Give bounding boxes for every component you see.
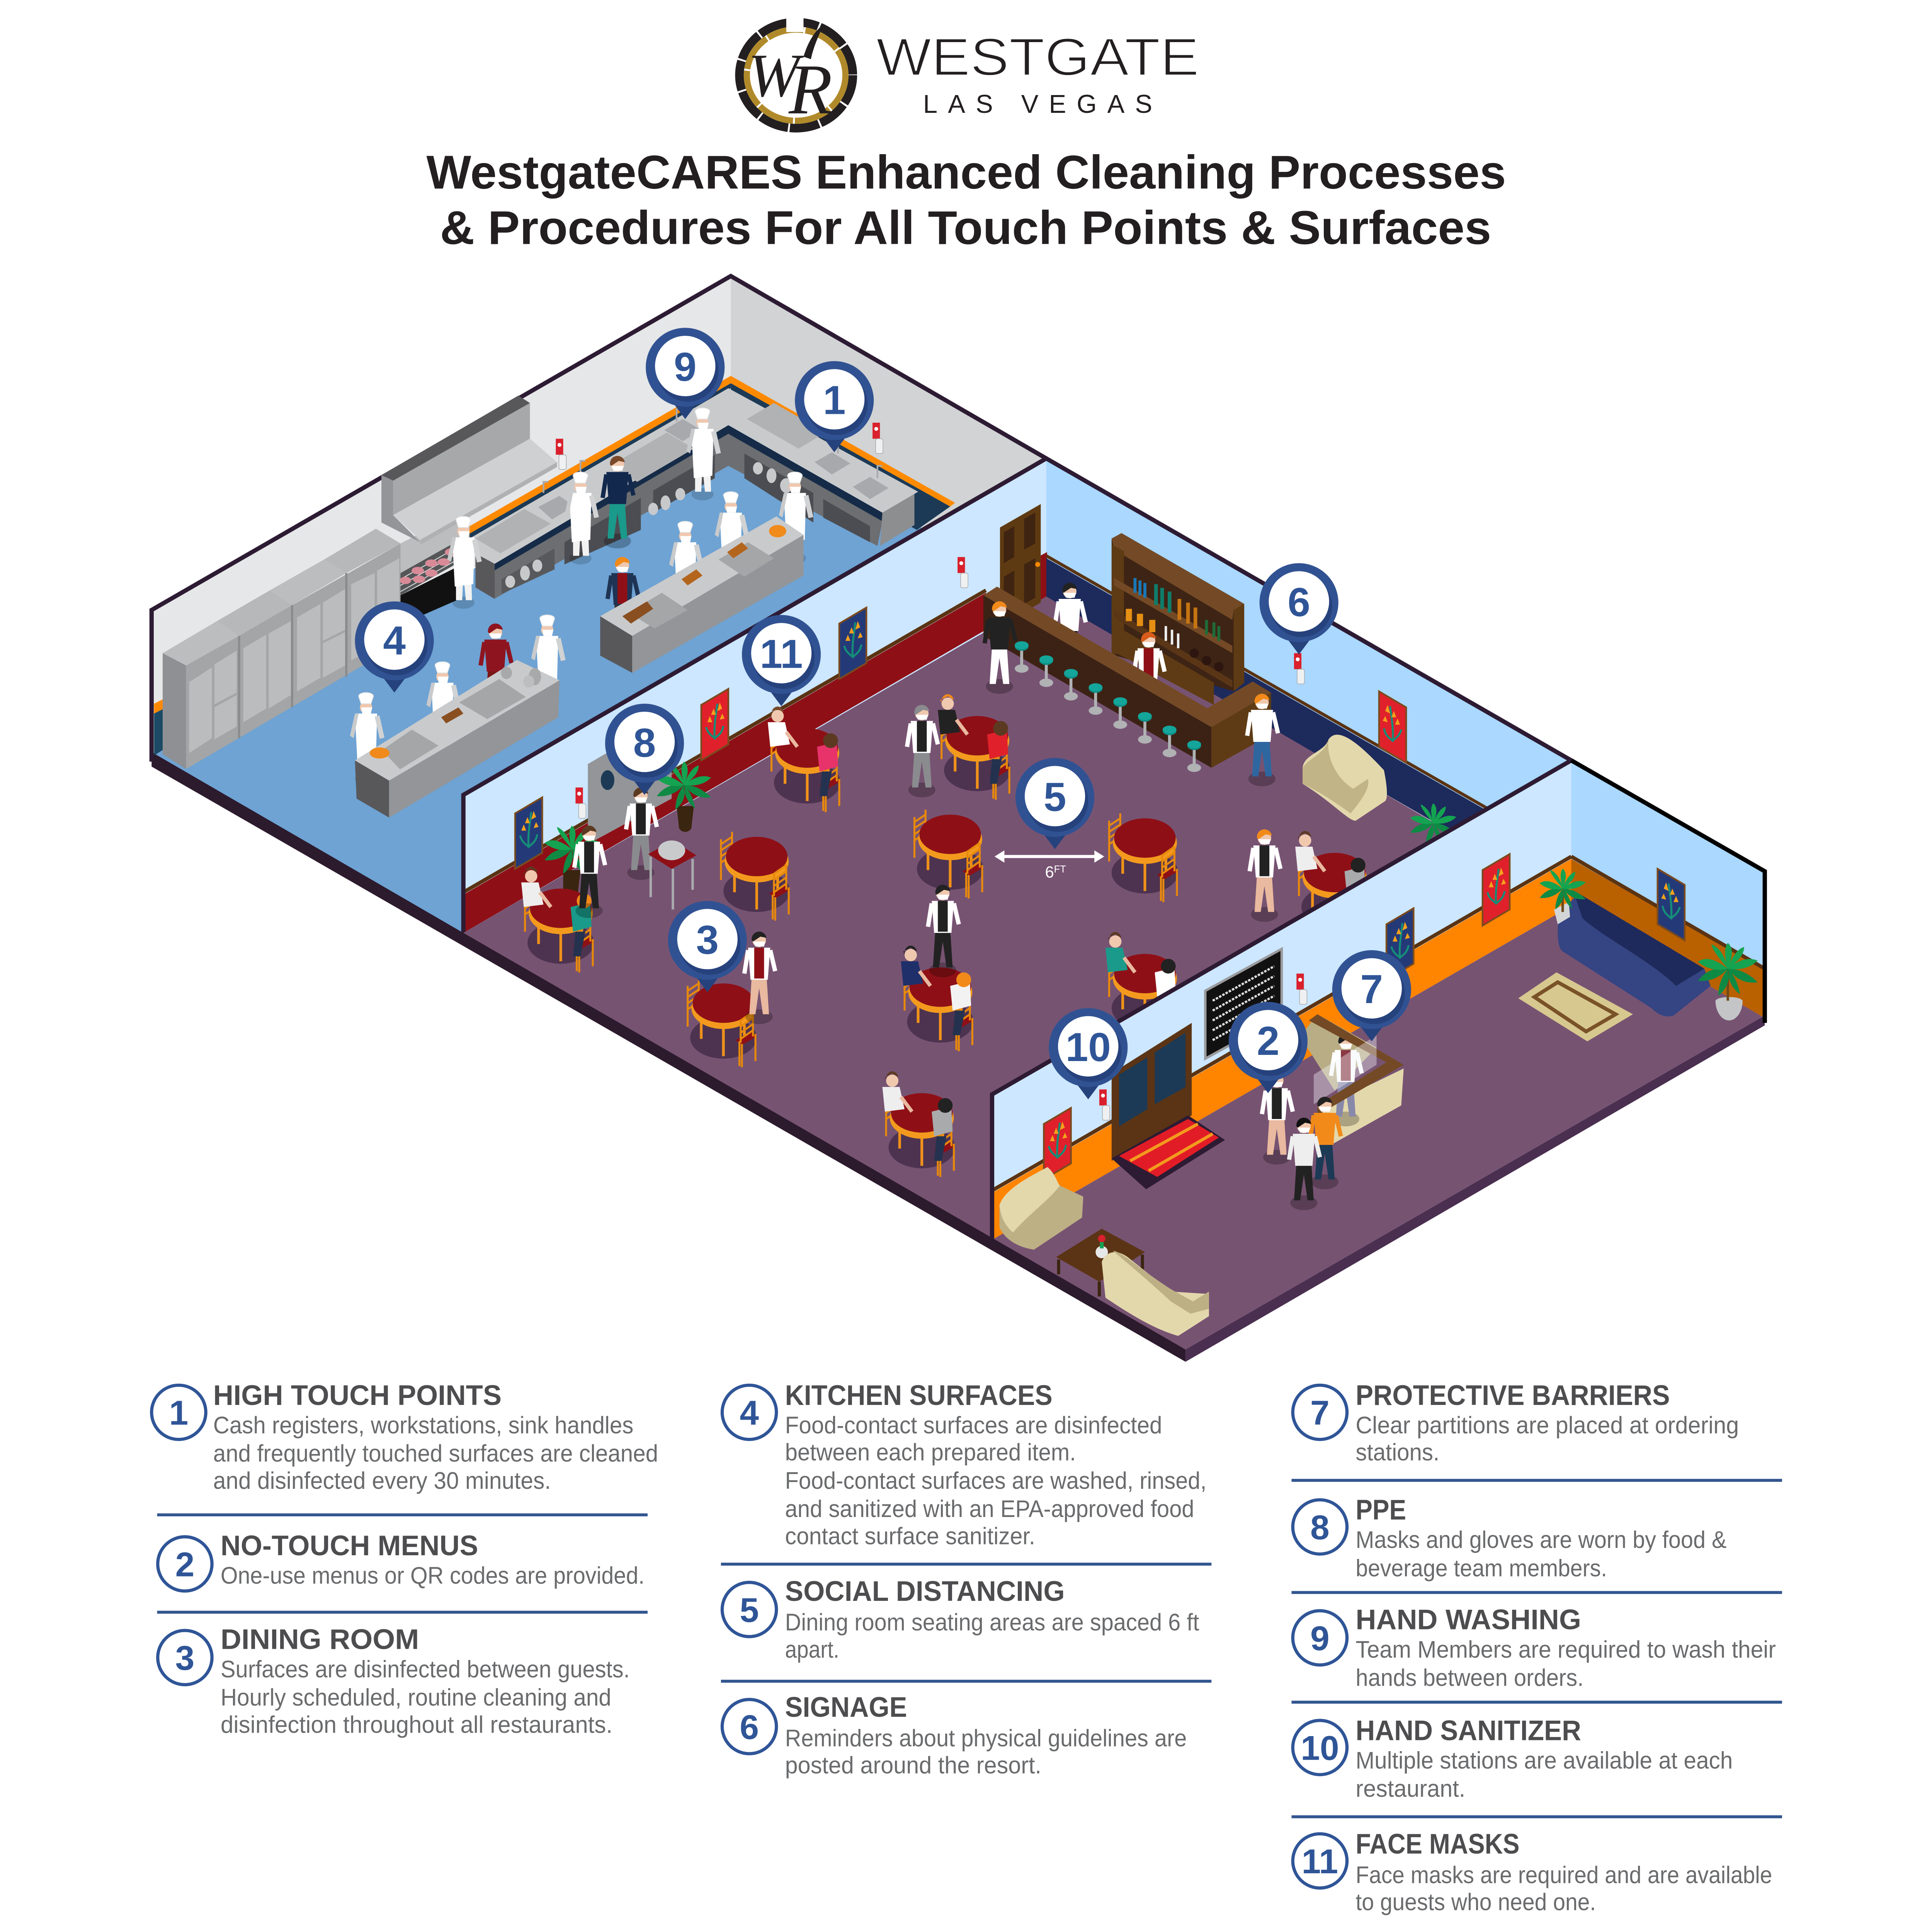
bar counter: [983, 587, 1271, 768]
hood: [381, 396, 557, 545]
entrance door: [1112, 1023, 1192, 1161]
kitchen staff behind island B: [350, 615, 563, 785]
lobby back wall: [1571, 760, 1765, 1023]
pin 2: 2: [1257, 1019, 1279, 1064]
grill: [400, 508, 469, 622]
table with guests 2: [938, 694, 1010, 800]
item 8: PPE: 8: [1310, 1508, 1330, 1547]
item 4: kitchen surfaces: between each prepared item.: [785, 1439, 1076, 1466]
bar shelving: [1112, 533, 1244, 705]
item 6: signage: 6: [740, 1708, 759, 1746]
item 3: dining room: Surfaces are disinfected between guests.: [221, 1656, 630, 1683]
item 5: social distancing: Dining room seating areas are spaced 6 ft: [785, 1609, 1199, 1636]
island A: [600, 516, 803, 673]
lobby armchair near wall: [1000, 1167, 1083, 1250]
pin 6: 6: [1287, 580, 1310, 625]
pin 6: [1260, 563, 1338, 655]
item 1: high touch points: 1: [169, 1393, 188, 1432]
panel: lobby: [992, 760, 1765, 1336]
dining floor: [463, 597, 1765, 1349]
logo: Westgate Las Vegas: [740, 12, 1199, 129]
item 1: high touch points: Cash registers, workstations, sink handles: [213, 1412, 633, 1439]
item 6: signage: SIGNAGE: [785, 1691, 907, 1723]
item 2: no-touch menus: 2: [175, 1545, 194, 1583]
coffee table: [1056, 1229, 1145, 1296]
legend column 1: [151, 1379, 658, 1738]
pin 2: [1229, 1002, 1308, 1093]
item 7: protective barriers: Clear partitions are placed at ordering: [1355, 1412, 1739, 1439]
table with guests 11: [1295, 831, 1368, 937]
table with guests 8: [901, 946, 974, 1051]
dining staff and patrons: [574, 601, 1281, 1024]
social distancing marker: [995, 850, 1104, 881]
plant: lobby right: [1698, 943, 1758, 1020]
item 7: protective barriers: [1293, 1379, 1739, 1466]
item 11: face masks: Face masks are required and are available: [1355, 1862, 1772, 1888]
item 8: PPE: [1293, 1494, 1726, 1582]
item 7: protective barriers: stations.: [1355, 1439, 1439, 1466]
logo wordmark: WESTGATE: [876, 28, 1199, 87]
pin 7: 7: [1361, 967, 1383, 1012]
pin 8: [605, 704, 684, 795]
item 9: hand washing: HAND WASHING: [1355, 1604, 1581, 1635]
pin 4: [355, 601, 434, 692]
item 1: high touch points: and disinfected every 30 minutes.: [213, 1468, 551, 1494]
panel: kitchen: [151, 276, 1046, 933]
pin 10: [1049, 1008, 1128, 1099]
item 10: hand sanitizer: HAND SANITIZER: [1355, 1714, 1581, 1746]
isometric restaurant floor plan: [151, 276, 1765, 1362]
rug: [1518, 972, 1633, 1041]
item 10: hand sanitizer: Multiple stations are available at each: [1355, 1747, 1733, 1774]
item 11: face masks: FACE MASKS: [1355, 1828, 1520, 1860]
pin 5: 5: [1044, 775, 1066, 820]
empty table 3: [915, 810, 983, 898]
item 4: kitchen surfaces: and sanitized with an EPA-approved food: [785, 1496, 1194, 1522]
island B: [355, 660, 560, 818]
item 9: hand washing: 9: [1310, 1619, 1330, 1658]
item 5: social distancing: 5: [740, 1590, 759, 1629]
item 9: hand washing: Team Members are required to wash their: [1355, 1636, 1776, 1663]
serving cart: [648, 840, 696, 910]
logo emblem: R: [788, 50, 832, 129]
floor slab: [151, 752, 1765, 1362]
item 5: social distancing: apart.: [785, 1636, 839, 1663]
pin 8: 8: [633, 720, 656, 765]
bar staff: [1055, 583, 1165, 724]
item 3: dining room: [158, 1623, 630, 1738]
item 4: kitchen surfaces: Food-contact surfaces are washed, rinsed,: [785, 1468, 1206, 1494]
plant: by dining wall: [545, 826, 599, 896]
pin 11: [742, 615, 821, 706]
pin 1: [795, 361, 874, 452]
pin 3: 3: [696, 918, 719, 963]
item 8: PPE: PPE: [1355, 1494, 1406, 1526]
item 9: hand washing: hands between orders.: [1355, 1665, 1583, 1691]
title: & Procedures For All Touch Points & Surfaces: [440, 202, 1491, 255]
item 2: no-touch menus: NO-TOUCH MENUS: [221, 1530, 478, 1561]
wall art and signage: [515, 557, 1406, 869]
item 1: high touch points: and frequently touched surfaces are cleaned: [213, 1440, 658, 1467]
table with guests 10: [883, 1071, 955, 1177]
service door: [588, 715, 672, 844]
item 10: hand sanitizer: restaurant.: [1355, 1776, 1465, 1802]
item 3: dining room: disinfection throughout all restaurants.: [221, 1711, 612, 1738]
legend column 3: [1292, 1379, 1782, 1916]
item 6: signage: [722, 1691, 1187, 1779]
social distancing marker: FT: [1054, 864, 1066, 875]
armchair: [1303, 735, 1387, 821]
item 7: protective barriers: PROTECTIVE BARRIERS: [1355, 1379, 1670, 1411]
item 3: dining room: DINING ROOM: [221, 1623, 419, 1655]
item 6: signage: Reminders about physical guidelines are: [785, 1725, 1187, 1752]
item 3: dining room: 3: [175, 1639, 194, 1677]
pin 3: [668, 901, 747, 992]
empty table 5: [721, 832, 790, 920]
item 8: PPE: Masks and gloves are worn by food &: [1355, 1527, 1726, 1553]
social distancing marker: 6: [1045, 863, 1054, 881]
panel: dining room: [463, 458, 1765, 1349]
logo emblem: [740, 12, 853, 129]
item 4: kitchen surfaces: 4: [740, 1393, 759, 1432]
item 4: kitchen surfaces: [722, 1379, 1206, 1549]
item 9: hand washing: [1293, 1604, 1776, 1691]
L-shaped counter: [458, 388, 918, 599]
kitchen staff at counter: [447, 408, 718, 609]
red entrance mat: [1112, 1115, 1225, 1189]
logo subtitle: LAS VEGAS: [923, 90, 1152, 119]
logo emblem: W: [748, 42, 804, 110]
item 7: protective barriers: 7: [1310, 1393, 1330, 1432]
lockers: [163, 529, 401, 769]
item 10: hand sanitizer: [1293, 1714, 1733, 1802]
menu board: [1205, 949, 1282, 1059]
pin 10: 10: [1066, 1025, 1111, 1070]
bar stools: [1015, 641, 1201, 772]
item 11: face masks: to guests who need one.: [1355, 1889, 1596, 1916]
item 1: high touch points: [151, 1379, 658, 1494]
pin 7: [1332, 950, 1411, 1041]
item 10: hand sanitizer: 10: [1301, 1728, 1339, 1767]
item 5: social distancing: [722, 1575, 1199, 1663]
item 11: face masks: 11: [1302, 1842, 1338, 1881]
item 5: social distancing: SOCIAL DISTANCING: [785, 1575, 1065, 1607]
item 8: PPE: beverage team members.: [1355, 1555, 1607, 1582]
blue sofa: [1558, 893, 1711, 1016]
item 2: no-touch menus: One-use menus or QR codes are provided.: [221, 1562, 645, 1589]
table with guests 9: [1105, 932, 1178, 1037]
lobby guests: [1262, 1072, 1341, 1210]
item 4: kitchen surfaces: KITCHEN SURFACES: [785, 1379, 1053, 1411]
pin 11: 11: [760, 632, 803, 677]
item 3: dining room: Hourly scheduled, routine cleaning and: [221, 1684, 611, 1711]
kitchen door: [1000, 504, 1041, 626]
lobby armchair near table: [1102, 1251, 1209, 1336]
item 2: no-touch menus: [158, 1530, 645, 1591]
plant: lobby corner: [1540, 869, 1586, 924]
lobby partition wall: [992, 760, 1571, 1240]
table with guests 6: [521, 867, 594, 972]
wall signs and sanitizers: [556, 423, 883, 469]
item 11: face masks: [1293, 1828, 1772, 1916]
plant: by service door: [657, 762, 711, 832]
legend column 2: [721, 1379, 1211, 1779]
item 4: kitchen surfaces: contact surface sanitizer.: [785, 1523, 1035, 1549]
callout pins: [355, 328, 1411, 1099]
plant: by far wall: [1410, 803, 1456, 844]
table with guests 1: [768, 707, 840, 812]
pin 1: 1: [823, 378, 846, 423]
empty table 7: [688, 978, 757, 1067]
item 1: high touch points: HIGH TOUCH POINTS: [213, 1379, 502, 1411]
empty table 4: [1109, 813, 1178, 902]
lobby wall art and signage: [1044, 854, 1685, 1179]
title: WestgateCARES Enhanced Cleaning Processes: [427, 146, 1506, 199]
title: [427, 146, 1506, 255]
pin 5: [1015, 758, 1094, 849]
reception desk with barrier: [1300, 1014, 1404, 1145]
pin 9: [646, 328, 724, 419]
dining walls: [463, 458, 1571, 933]
item 4: kitchen surfaces: Food-contact surfaces are disinfected: [785, 1412, 1162, 1439]
item 6: signage: posted around the resort.: [785, 1752, 1041, 1779]
pin 9: 9: [674, 345, 697, 390]
pin 4: 4: [383, 618, 406, 663]
kitchen staff behind island A: [607, 472, 811, 650]
dining tables: [521, 694, 1368, 1177]
